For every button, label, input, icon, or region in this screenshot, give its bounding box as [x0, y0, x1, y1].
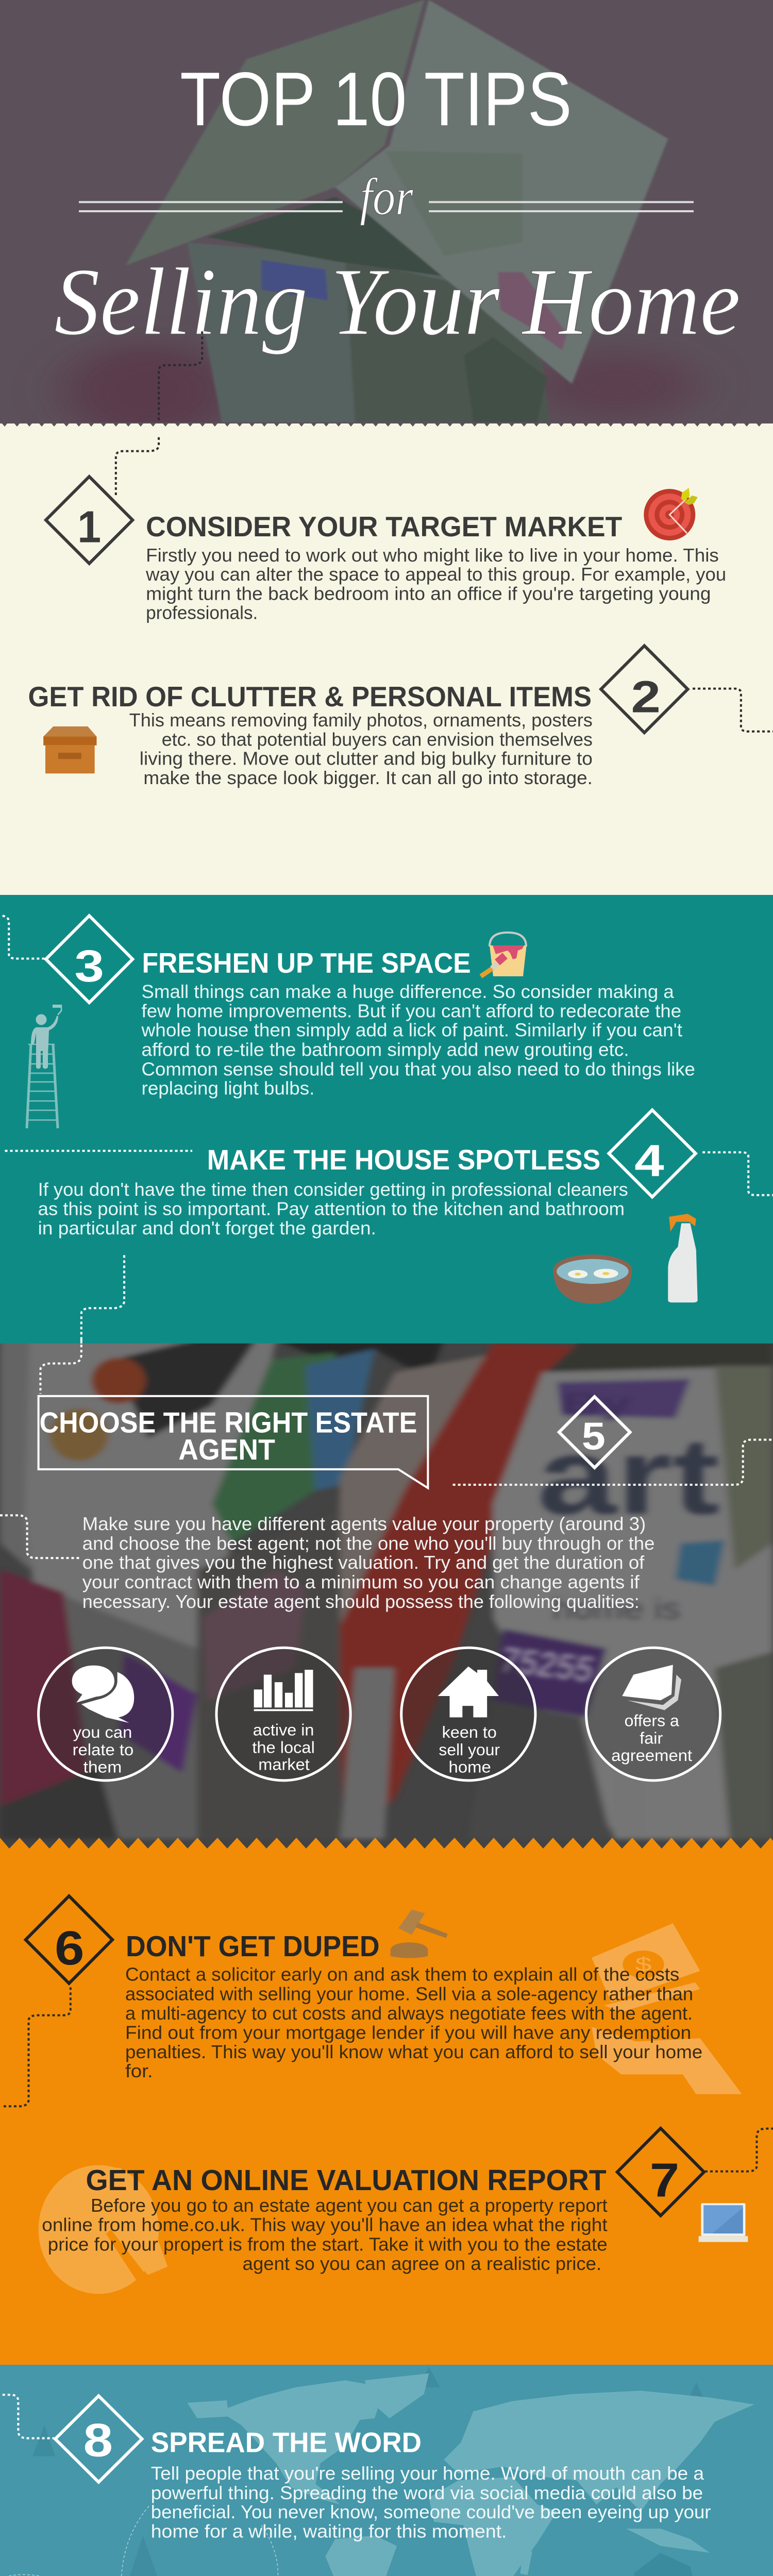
panel: cream section, tips 1 and 2 — [0, 423, 773, 895]
quality circle: you can relate to them: you can — [73, 1723, 132, 1741]
photo sign lettering — [496, 1387, 720, 1690]
body: tip 2 — [129, 709, 593, 788]
dashed connector to tip 8 — [3, 2395, 54, 2438]
panel: orange section, tips 6 and 7 — [0, 1838, 773, 2365]
body: tip 6 — [125, 1964, 702, 2081]
badge: number 4: 4 — [634, 1136, 664, 1185]
speech box heading: tip 5: CHOOSE THE RIGHT ESTATE — [40, 1406, 417, 1439]
quality circle: you can relate to them: them — [83, 1758, 122, 1776]
quality circle: active in the local market — [216, 1648, 350, 1781]
badge: number 3: 3 — [74, 941, 104, 991]
dashed connector to tip 1 — [116, 437, 159, 496]
dashed connector to tip 5 — [81, 1255, 124, 1350]
panel: header: for — [360, 167, 413, 226]
quality circle: offers a fair agreement: offers a — [625, 1711, 679, 1730]
badge: number 7: 7 — [650, 2154, 679, 2207]
badge: number 7 — [617, 2128, 704, 2216]
quality circle: you can relate to them — [39, 1648, 173, 1781]
badge: number 4 — [609, 1110, 696, 1197]
dashed connector from tip 4 — [40, 1340, 81, 1394]
icon: bowl with flowers — [553, 1255, 632, 1303]
badge: number 8 — [55, 2396, 142, 2482]
heading: tip 3: FRESHEN UP THE SPACE — [142, 947, 471, 979]
photo dark overlay — [0, 1340, 773, 1855]
body: tip 7 — [42, 2195, 608, 2274]
heading: tip 8: SPREAD THE WORD — [151, 2427, 422, 2459]
quality circle: keen to sell your home: keen to — [442, 1723, 497, 1741]
quality circle: active in the local market: market — [258, 1755, 310, 1774]
icon: person on ladder painting — [27, 1005, 62, 1128]
background photo: estate agent signs — [0, 1340, 773, 1855]
watermark: triangles — [32, 2366, 757, 2576]
badge: number 5: 5 — [582, 1415, 606, 1458]
dashed connector from tip 5 — [451, 1440, 771, 1485]
body: tip 8 — [151, 2463, 711, 2542]
badge: number 1: 1 — [77, 502, 101, 552]
quality circle: you can relate to them: relate to — [73, 1740, 133, 1759]
decorative dashed swirl — [0, 2504, 278, 2576]
body: tip 8: home for a while, waiting for this moment. — [151, 2521, 507, 2542]
badge: number 5 — [559, 1397, 630, 1468]
badge: number 6: 6 — [55, 1922, 85, 1975]
dashed connector — [159, 331, 202, 422]
badge: number 6 — [26, 1896, 112, 1984]
body: tip 3: replacing light bulbs. — [142, 1078, 314, 1099]
watermark: dollar coin — [623, 1951, 664, 1978]
photo sign lettering: home is — [552, 1592, 680, 1625]
quality circle: offers a fair agreement: fair — [640, 1728, 663, 1748]
badge: number 1 — [46, 477, 132, 564]
quality circle: keen to sell your home: sell your — [439, 1740, 500, 1759]
body: tip 1: professionals. — [146, 602, 258, 623]
panel: teal section, tips 3 and 4 — [0, 895, 773, 1350]
body: tip 4: in particular and don't forget the garden. — [38, 1217, 376, 1239]
header photo: paper-money house — [64, 0, 700, 439]
watermark: dollar coin: $ — [635, 1954, 651, 1975]
double rule right — [429, 202, 694, 211]
panel: header — [0, 0, 773, 439]
icon: laptop — [699, 2203, 748, 2242]
watermark: money in hand — [592, 1923, 742, 2094]
photo sign lettering: 75255 — [496, 1639, 599, 1690]
quality circle: offers a fair agreement: agreement — [611, 1746, 692, 1765]
quality circle: offers a fair agreement — [586, 1648, 720, 1781]
body: tip 3 — [141, 981, 695, 1099]
dashed connector from tip 2 — [693, 689, 773, 732]
sawtooth edge — [2, 423, 762, 427]
double rule left — [79, 202, 343, 211]
heading: tip 6: DON'T GET DUPED — [126, 1930, 380, 1962]
body: tip 7: agent so you can agree on a realistic price. — [243, 2253, 601, 2274]
icon: spray bottle — [668, 1214, 698, 1302]
body: tip 1 — [145, 545, 726, 623]
dashed connector to tip 4 — [5, 1150, 192, 1152]
watermark: world map — [188, 2374, 754, 2576]
badge: number 2: 2 — [631, 672, 661, 722]
badge: number 8: 8 — [83, 2414, 113, 2466]
badge: number 3 — [46, 916, 132, 1003]
dashed connector from tip 7 — [705, 2129, 773, 2172]
quality circle: active in the local market: active in — [253, 1720, 314, 1739]
dashed connector to body — [0, 1515, 81, 1558]
dashed connector from tip 6 — [3, 1987, 71, 2106]
icon: target with arrow — [644, 488, 698, 540]
speech box heading: tip 5: AGENT — [178, 1434, 275, 1466]
watermark: pie chart — [39, 2165, 167, 2294]
speech box heading: tip 5 — [39, 1396, 428, 1488]
body: tip 6: for. — [125, 2061, 153, 2081]
photo sign lettering: By — [562, 1387, 631, 1420]
photo sign lettering: art — [537, 1415, 720, 1537]
icon: gavel — [391, 1909, 448, 1958]
panel: blue section, tips 8 and 9 — [0, 2365, 773, 2576]
dashed connector to tip 3 — [3, 916, 45, 959]
panel: estate agent photo section, tip 5 — [0, 1340, 773, 1855]
quality circle: keen to sell your home — [401, 1648, 535, 1781]
quality circle: keen to sell your home: home — [449, 1758, 491, 1776]
quality circle: active in the local market: the local — [252, 1738, 315, 1756]
badge: number 2 — [601, 646, 688, 733]
icon: storage box — [43, 726, 97, 773]
body: tip 4 — [38, 1179, 628, 1239]
icon: paint bucket and brush — [481, 933, 527, 976]
dashed connector from tip 4 — [702, 1153, 773, 1195]
body: tip 5 — [82, 1514, 654, 1612]
